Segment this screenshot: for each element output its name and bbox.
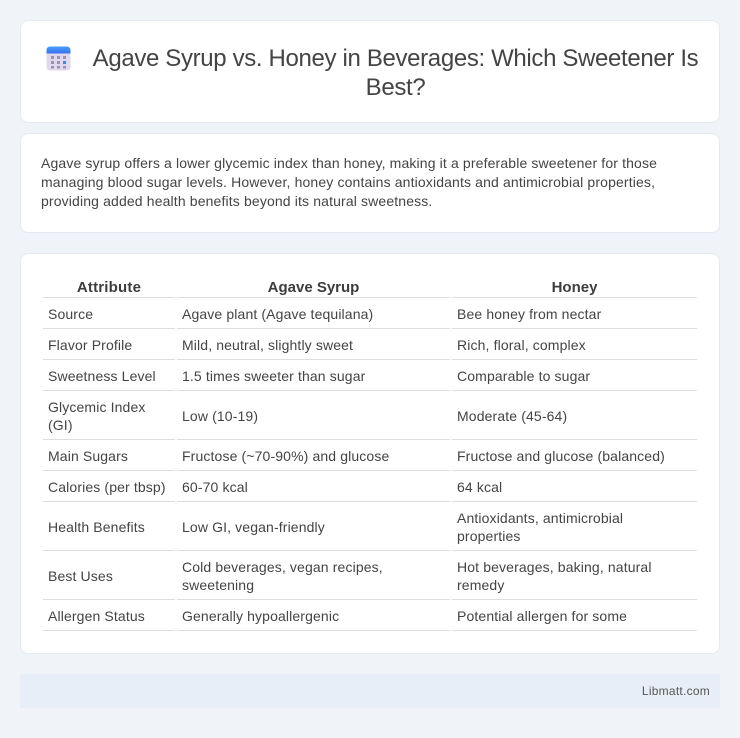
row: sweetness level: Sweetness Level <box>48 368 156 384</box>
row: allergen status: Allergen Status <box>48 608 145 624</box>
row: main sugars <box>43 448 697 471</box>
footer bar <box>20 674 720 708</box>
row: best uses: Hot beverages, baking, natural <box>457 559 652 575</box>
row: flavor profile: Flavor Profile <box>48 337 132 353</box>
row: flavor profile <box>43 337 697 360</box>
row: health benefits: Low GI, vegan-friendly <box>182 519 325 535</box>
table header: Agave Syrup <box>268 279 359 296</box>
row: health benefits <box>43 510 697 551</box>
row: sweetness level: Comparable to sugar <box>457 368 590 384</box>
row: health benefits: Antioxidants, antimicrobial <box>457 510 623 526</box>
title: Agave Syrup vs. Honey in Beverages: Which Sweetener Is Best? <box>93 45 698 101</box>
footer text: Libmatt.com: Libmatt.com <box>642 684 710 698</box>
row: main sugars: Fructose and glucose (balanced) <box>457 448 665 464</box>
row: best uses: Best Uses <box>48 568 113 584</box>
row: glycemic index: Moderate (45-64) <box>457 408 567 424</box>
table header <box>43 279 697 298</box>
row: sweetness level: 1.5 times sweeter than sugar <box>182 368 365 384</box>
row: allergen status <box>43 608 697 631</box>
row: best uses <box>43 559 697 600</box>
intro text: managing blood sugar levels. However, honey contains antioxidants and antimicrobial properties, <box>41 174 655 190</box>
row: calories: 64 kcal <box>457 479 502 495</box>
row: calories: 60-70 kcal <box>182 479 248 495</box>
panel: comparison table <box>20 253 720 654</box>
intro text: Agave syrup offers a lower glycemic index than honey, making it a preferable sweetener for those <box>41 155 657 171</box>
row: calories <box>43 479 697 502</box>
row: source: Bee honey from nectar <box>457 306 601 322</box>
row: glycemic index: (GI) <box>48 417 73 433</box>
row: flavor profile: Mild, neutral, slightly sweet <box>182 337 353 353</box>
row: glycemic index: Glycemic Index <box>48 399 146 415</box>
row: best uses: sweetening <box>182 577 254 593</box>
intro text: providing added health benefits beyond its natural sweetness. <box>41 193 432 209</box>
row: best uses: Cold beverages, vegan recipes, <box>182 559 383 575</box>
table header: Honey <box>552 279 597 296</box>
row: calories: Calories (per tbsp) <box>48 479 166 495</box>
row: glycemic index <box>43 399 697 440</box>
row: source: Source <box>48 306 93 322</box>
icon: calendar <box>46 46 70 70</box>
row: allergen status: Generally hypoallergenic <box>182 608 339 624</box>
row: best uses: remedy <box>457 577 504 593</box>
row: main sugars: Fructose (~70-90%) and glucose <box>182 448 389 464</box>
row: allergen status: Potential allergen for some <box>457 608 627 624</box>
header panel <box>20 20 720 123</box>
row: sweetness level <box>43 368 697 391</box>
row: health benefits: Health Benefits <box>48 519 145 535</box>
row: source <box>43 306 697 329</box>
row: health benefits: properties <box>457 528 521 544</box>
table header: Attribute <box>77 279 141 296</box>
intro panel <box>20 133 720 233</box>
intro text <box>41 155 657 209</box>
row: source: Agave plant (Agave tequilana) <box>182 306 373 322</box>
row: main sugars: Main Sugars <box>48 448 128 464</box>
row: glycemic index: Low (10-19) <box>182 408 258 424</box>
row: flavor profile: Rich, floral, complex <box>457 337 586 353</box>
